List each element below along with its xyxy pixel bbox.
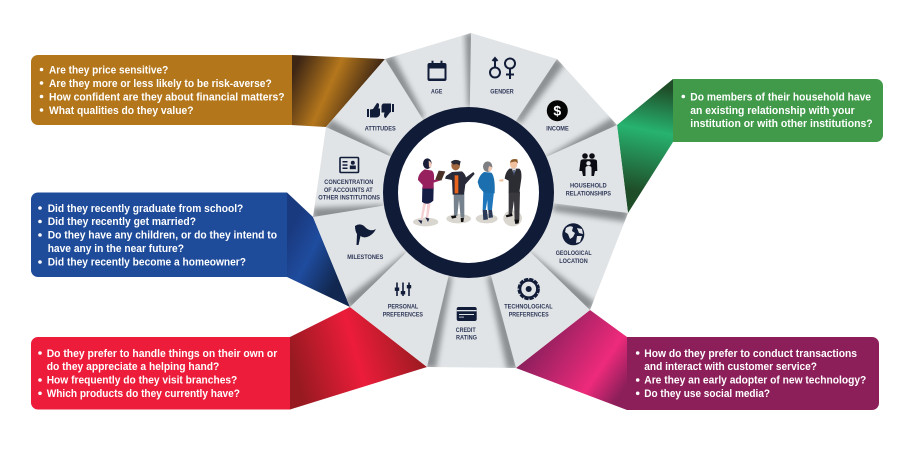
panel: personal preferences callout xyxy=(31,307,427,410)
segment: technological preferences xyxy=(504,280,553,319)
text: technological preferences questions: Are they an early adopter of new technology? xyxy=(644,375,866,387)
ribbon: brown xyxy=(291,55,385,127)
label: ATTITUDES xyxy=(365,125,396,132)
ribbon: blue xyxy=(286,192,350,307)
text: personal preferences questions xyxy=(38,348,278,400)
segment: gender xyxy=(490,58,515,95)
segment: credit rating xyxy=(456,307,477,342)
text: household question xyxy=(682,91,873,130)
text: milestones questions: Did they recently get married? xyxy=(48,216,196,228)
label line 2: OF ACCOUNTS AT xyxy=(324,187,373,194)
text: technological preferences questions: How do they prefer to conduct transactions xyxy=(644,348,857,360)
text: attitudes questions: How confident are they about financial matters? xyxy=(49,92,285,104)
panel: milestones callout xyxy=(31,192,350,307)
person: woman in blue xyxy=(476,161,498,223)
box: red xyxy=(31,337,290,410)
panel: household relationships callout xyxy=(617,79,883,213)
icon: gender symbols xyxy=(490,58,515,79)
fold shadows xyxy=(312,33,628,370)
segment: household relationships xyxy=(566,153,611,198)
label: HOUSEHOLD xyxy=(570,183,607,190)
person: man in dark suit xyxy=(499,159,522,226)
label line 3: OTHER INSTITUTIONS xyxy=(318,195,380,202)
icon: family xyxy=(579,153,597,176)
label: INCOME xyxy=(546,125,569,132)
box: brown xyxy=(31,55,292,125)
segment: personal preferences xyxy=(383,282,423,319)
text: technological preferences questions: Do they use social media? xyxy=(644,388,770,400)
text: milestones questions: Do they have any children, or do they intend to xyxy=(48,230,277,242)
icon: sliders xyxy=(395,282,411,296)
text: attitudes questions xyxy=(40,64,285,117)
text: personal preferences questions: Which products do they currently have? xyxy=(47,388,240,400)
text: milestones questions: Did they recently graduate from school? xyxy=(48,203,243,215)
label line 2: RATING xyxy=(456,335,477,342)
text: milestones questions xyxy=(38,203,277,269)
text: attitudes questions: Are they more or less likely to be risk-averse? xyxy=(49,78,272,90)
segment: age xyxy=(428,61,446,95)
label line 2: RELATIONSHIPS xyxy=(566,191,611,198)
segment: milestones xyxy=(347,224,383,261)
segment: attitudes xyxy=(365,103,396,132)
wheel base xyxy=(313,33,628,368)
label: CONCENTRATION xyxy=(324,179,373,186)
label: PERSONAL xyxy=(388,304,419,311)
ribbon: green xyxy=(617,79,674,213)
panel: attitudes callout xyxy=(31,55,385,127)
ribbon: magenta xyxy=(516,310,628,410)
text: technological preferences questions xyxy=(636,348,866,400)
person: woman in magenta xyxy=(413,158,445,226)
label line 2: LOCATION xyxy=(559,258,588,265)
ribbon: red xyxy=(289,307,427,410)
box: purple xyxy=(627,337,879,410)
icon: calendar xyxy=(428,61,446,81)
text: milestones questions: Did they recently become a homeowner? xyxy=(48,257,246,269)
wheel: segmented decagon xyxy=(312,33,628,370)
text: personal preferences questions: How frequently do they visit branches? xyxy=(47,375,237,387)
icon: flag xyxy=(355,224,376,245)
segment: geological location xyxy=(556,223,592,265)
text: attitudes questions: Are they price sensitive? xyxy=(49,64,168,76)
label line 2: PREFERENCES xyxy=(509,312,549,319)
icon: globe xyxy=(562,223,584,245)
label: TECHNOLOGICAL xyxy=(504,304,553,311)
panel: technological preferences callout xyxy=(516,310,879,410)
person: man in orange shirt xyxy=(445,160,475,223)
text: milestones questions: have any in the near future? xyxy=(48,243,184,255)
label: MILESTONES xyxy=(347,254,383,261)
label: GENDER xyxy=(490,88,514,95)
box: green xyxy=(673,79,883,142)
segment: income xyxy=(546,100,569,132)
label: AGE xyxy=(431,88,442,95)
text: household question: an existing relationship with your xyxy=(690,105,855,117)
text: personal preferences questions: do they appreciate a helping hand? xyxy=(47,361,219,373)
icon: gear xyxy=(519,280,538,298)
center ring xyxy=(390,114,546,270)
box: blue xyxy=(31,192,287,277)
label: CREDIT xyxy=(456,327,476,334)
icon: id card xyxy=(340,158,358,172)
label line 2: PREFERENCES xyxy=(383,312,423,319)
text: household question: institution or with other institutions? xyxy=(690,118,873,130)
icon: thumbs up and down xyxy=(367,103,394,118)
text: personal preferences questions: Do they prefer to handle things on their own or xyxy=(47,348,278,360)
text: household question: Do members of their household have xyxy=(690,91,871,103)
segment: concentration of accounts xyxy=(318,158,380,202)
icon: credit card xyxy=(457,307,477,321)
text: technological preferences questions: and interact with customer service? xyxy=(644,361,817,373)
text: attitudes questions: What qualities do they value? xyxy=(49,105,194,117)
icon: dollar coin: $ xyxy=(553,103,561,119)
illustration: four people talking xyxy=(413,158,522,226)
label: GEOLOGICAL xyxy=(556,250,592,257)
